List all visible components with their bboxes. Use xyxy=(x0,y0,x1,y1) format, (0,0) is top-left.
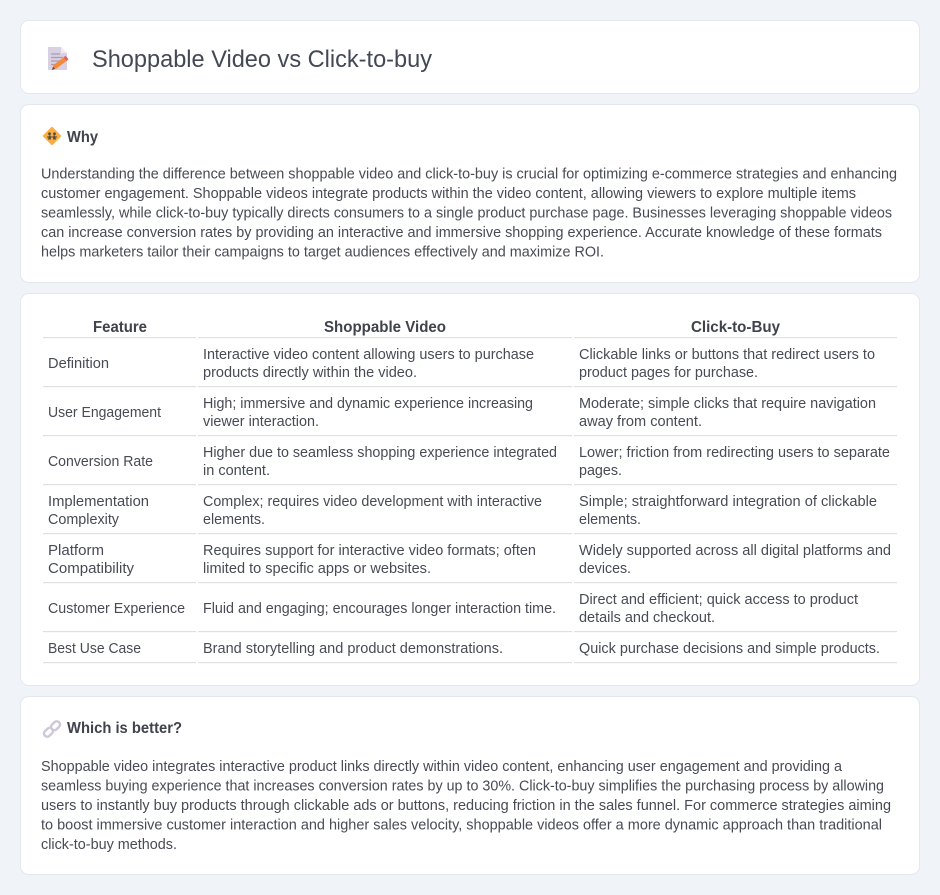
row: customer experience: Fluid and engaging; encourages longer interaction time. xyxy=(203,601,556,617)
panel: why xyxy=(20,104,920,282)
row: user engagement: User Engagement xyxy=(48,405,161,421)
row: conversion rate: pages. xyxy=(579,463,622,479)
row: platform compatibility: limited to specific apps or websites. xyxy=(203,561,431,577)
text block: why paragraph: helps marketers tailor their campaigns to target audiences effectively and maximize ROI. xyxy=(41,244,604,260)
row: platform compatibility: Platform xyxy=(48,543,104,559)
text block: why paragraph: seamlessly, while click-to-buy typically directs consumers to a single product purchase page. Businesses leveraging shoppable videos xyxy=(41,206,892,222)
row: customer experience xyxy=(48,592,858,626)
row: platform compatibility: Compatibility xyxy=(48,561,135,577)
row: user engagement xyxy=(48,396,876,430)
row: platform compatibility: devices. xyxy=(579,561,631,577)
row: implementation complexity: Implementation xyxy=(48,494,149,510)
text block: why paragraph: customer engagement. Shoppable videos integrate products within the video content, allowing viewers to explore multiple items xyxy=(41,186,856,202)
row: implementation complexity: Complex; requires video development with interactive xyxy=(203,494,542,510)
row: conversion rate: in content. xyxy=(203,463,270,479)
row: definition: Definition xyxy=(48,356,109,372)
panel: title header xyxy=(20,20,920,94)
text block: which is better paragraph: Shoppable video integrates interactive product links directly within video content, enhancing user engagement and providing a xyxy=(41,759,842,775)
row: conversion rate: Higher due to seamless shopping experience integrated xyxy=(203,445,557,461)
row: platform compatibility xyxy=(48,543,891,577)
row: customer experience: Customer Experience xyxy=(48,601,185,617)
row: platform compatibility: Widely supported across all digital platforms and xyxy=(579,543,891,559)
row: best use case xyxy=(48,641,880,657)
row: definition: Interactive video content allowing users to purchase xyxy=(203,347,534,363)
row: implementation complexity xyxy=(48,494,877,528)
row: implementation complexity: Complexity xyxy=(48,512,120,528)
row: customer experience: details and checkout. xyxy=(579,610,715,626)
row: implementation complexity: elements. xyxy=(203,512,265,528)
row: conversion rate xyxy=(48,445,890,479)
table header row: Feature xyxy=(93,319,147,336)
icon: chain link xyxy=(43,720,61,738)
row: conversion rate: Lower; friction from redirecting users to separate xyxy=(579,445,890,461)
text block: why paragraph xyxy=(41,166,897,260)
text block: which is better paragraph: to boost immersive customer interaction and higher sales velocity, shoppable videos offer a more dynamic approach than traditional xyxy=(41,818,882,834)
text block: which is better paragraph: seamless buying experience that increases conversion rates by up to 30%. Click-to-buy simplifies the purchasing process by allowing xyxy=(41,778,884,794)
row: best use case: Brand storytelling and product demonstrations. xyxy=(203,641,503,657)
title: Shoppable Video vs Click-to-buy xyxy=(92,46,432,73)
heading: why: Why xyxy=(67,129,98,146)
text block: why paragraph: can increase conversion rates by providing an interactive and immersive shopping experience. Accurate knowledge of these formats xyxy=(41,225,882,241)
row: platform compatibility: Requires support for interactive video formats; often xyxy=(203,543,536,559)
panel: which is better xyxy=(20,696,920,874)
row: definition: product pages for purchase. xyxy=(579,365,758,381)
row: user engagement: away from content. xyxy=(579,414,702,430)
row: conversion rate: Conversion Rate xyxy=(48,454,153,470)
panel: comparison table xyxy=(20,294,920,686)
text block: which is better paragraph: users to instantly buy products through clickable ads or buttons, reducing friction in the sales funnel. For commerce strategies aiming xyxy=(41,798,891,814)
row: definition: products directly within the video. xyxy=(203,365,417,381)
row: customer experience: Direct and efficient; quick access to product xyxy=(579,592,858,608)
row: best use case: Best Use Case xyxy=(48,641,141,657)
text block: which is better paragraph xyxy=(41,759,891,853)
text block: which is better paragraph: click-to-buy methods. xyxy=(41,837,177,853)
text block: why paragraph: Understanding the difference between shoppable video and click-to-buy is crucial for optimizing e-commerce strategies and enhancing xyxy=(41,166,897,182)
row: definition xyxy=(48,347,875,381)
table header row: Shoppable Video xyxy=(324,319,446,336)
row: user engagement: Moderate; simple clicks that require navigation xyxy=(579,396,876,412)
row: implementation complexity: Simple; straightforward integration of clickable xyxy=(579,494,877,510)
table header row xyxy=(93,319,780,336)
row: best use case: Quick purchase decisions and simple products. xyxy=(579,641,880,657)
icon: warning diamond xyxy=(44,128,60,144)
row: implementation complexity: elements. xyxy=(579,512,641,528)
row: user engagement: High; immersive and dynamic experience increasing xyxy=(203,396,533,412)
row: definition: Clickable links or buttons that redirect users to xyxy=(579,347,875,363)
heading: which is better: Which is better? xyxy=(67,720,182,737)
icon: document with pencil xyxy=(48,47,68,70)
row: user engagement: viewer interaction. xyxy=(203,414,319,430)
table header row: Click-to-Buy xyxy=(691,319,780,336)
